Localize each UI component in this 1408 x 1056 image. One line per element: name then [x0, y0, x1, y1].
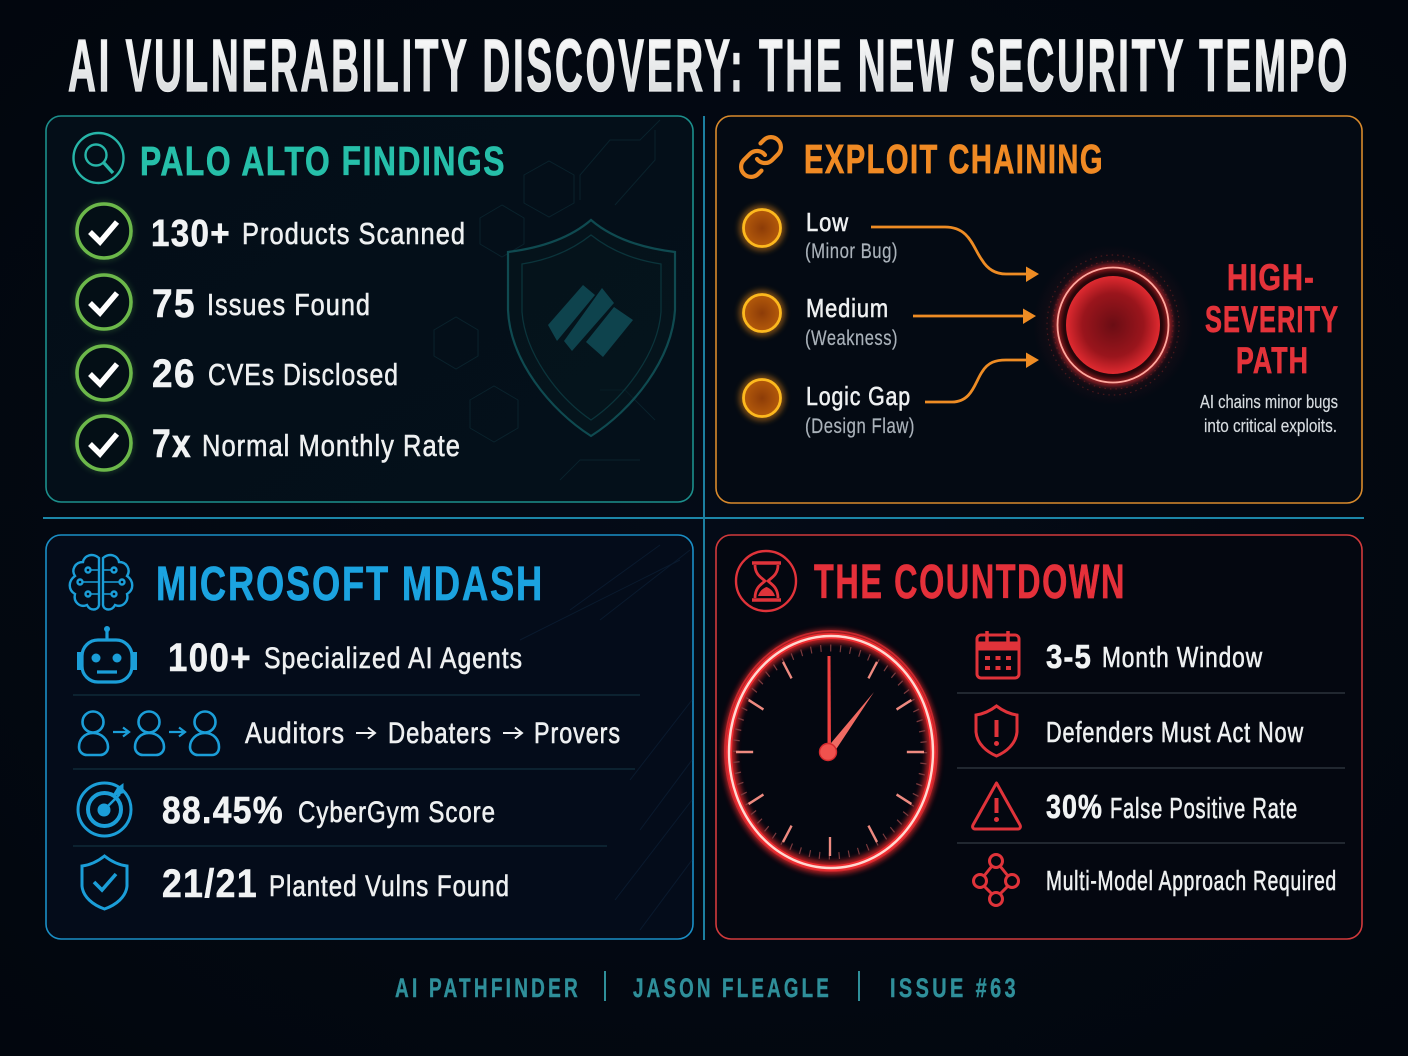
- text: agent pipeline: Auditors: [245, 717, 345, 750]
- stat: planted vulns: 21/21: [162, 862, 258, 906]
- icon: network: [974, 854, 1018, 906]
- label: logic gap: [805, 381, 915, 438]
- stat: ai agents: Specialized AI Agents: [264, 642, 523, 675]
- heading: palo alto findings: PALO ALTO FINDINGS: [140, 138, 506, 184]
- icon: check 2: [74, 272, 134, 332]
- icon: red orb: [1033, 245, 1193, 405]
- stat: ai agents: 100+: [168, 636, 252, 680]
- icon: brain: [70, 555, 132, 610]
- stat: ai agents: [168, 636, 523, 680]
- clock hands: [820, 656, 874, 760]
- stat: issues found: 75: [152, 282, 196, 326]
- stat: cves disclosed: [152, 352, 399, 396]
- caption: ai chains: AI chains minor bugs: [1200, 392, 1338, 412]
- arrow: logic gap to path: [925, 352, 1039, 402]
- node: low: [739, 205, 785, 251]
- footer credits: JASON FLEAGLE: [633, 973, 832, 1003]
- text: agent pipeline: Debaters: [388, 717, 492, 750]
- heading: microsoft mdash: MICROSOFT MDASH: [156, 558, 544, 611]
- icon: agent pipeline: [79, 712, 219, 755]
- icon: shield alert: [976, 706, 1017, 756]
- heading: exploit chaining: EXPLOIT CHAINING: [804, 136, 1104, 182]
- arrow: low to path: [871, 227, 1039, 282]
- label: medium: (Weakness): [805, 327, 898, 350]
- label: low: [805, 207, 898, 263]
- footer credits: ISSUE #63: [890, 973, 1019, 1003]
- panel: the countdown: [716, 535, 1362, 939]
- stat: monthly rate: [152, 422, 461, 466]
- label: high-severity path: PATH: [1236, 340, 1309, 381]
- icon: check 4: [74, 413, 134, 473]
- stat: month window: 3-5: [1046, 638, 1092, 675]
- icon: chain link: [741, 137, 781, 177]
- stat: month window: [1046, 638, 1263, 675]
- stat: month window: Month Window: [1102, 642, 1263, 674]
- label: low: (Minor Bug): [805, 240, 898, 263]
- text: defenders: Defenders Must Act Now: [1046, 717, 1304, 749]
- stat: cves disclosed: CVEs Disclosed: [208, 357, 399, 392]
- stat: products scanned: Products Scanned: [242, 216, 466, 251]
- node: logic gap: [739, 375, 785, 421]
- label: medium: [805, 293, 898, 350]
- label: medium: Medium: [806, 293, 889, 323]
- stat: products scanned: [151, 213, 466, 255]
- stat: cybergym score: [162, 790, 496, 832]
- footer credits: [395, 971, 1019, 1003]
- stat: planted vulns: Planted Vulns Found: [269, 870, 510, 903]
- icon: calendar: [977, 631, 1019, 678]
- heading: the countdown: THE COUNTDOWN: [814, 556, 1126, 609]
- arrow: medium to path: [913, 308, 1036, 324]
- stat: monthly rate: 7x: [152, 422, 192, 466]
- stat: false positive: [1046, 788, 1298, 825]
- stat: monthly rate: Normal Monthly Rate: [202, 428, 461, 463]
- panel: exploit chaining: [716, 116, 1362, 503]
- caption: ai chains: into critical exploits.: [1204, 416, 1337, 436]
- caption: ai chains: [1200, 392, 1338, 436]
- label: low: Low: [806, 207, 849, 237]
- node: medium: [739, 290, 785, 336]
- icon: check 1: [74, 201, 134, 261]
- footer credits: AI PATHFINDER: [395, 973, 581, 1003]
- label: logic gap: Logic Gap: [806, 381, 911, 411]
- panel: microsoft mdash: [46, 535, 693, 939]
- icon: check 3: [74, 343, 134, 403]
- text: agent pipeline: Provers: [534, 717, 621, 750]
- stat: issues found: Issues Found: [207, 287, 371, 322]
- stat: cves disclosed: 26: [152, 352, 196, 396]
- stat: products scanned: 130+: [151, 213, 231, 255]
- text: agent pipeline: [245, 717, 621, 750]
- icon: watermark shield: [508, 220, 675, 436]
- icon: magnifier: [74, 133, 124, 183]
- stat: cybergym score: CyberGym Score: [298, 796, 496, 829]
- icon: shield check: [82, 856, 127, 909]
- icon: hourglass: [736, 551, 796, 611]
- label: high-severity path: SEVERITY: [1205, 299, 1339, 340]
- panel: palo alto findings: [46, 116, 693, 502]
- label: logic gap: (Design Flaw): [805, 415, 915, 438]
- label: high-severity path: HIGH-: [1227, 257, 1315, 298]
- clock: [725, 631, 937, 871]
- stat: cybergym score: 88.45%: [162, 790, 284, 832]
- icon: warning triangle: [973, 783, 1020, 829]
- icon: robot: [79, 626, 135, 682]
- stat: false positive: False Positive Rate: [1110, 793, 1298, 825]
- stat: false positive: 30%: [1046, 788, 1103, 825]
- label: high-severity path: [1205, 257, 1339, 381]
- stat: issues found: [152, 282, 371, 326]
- icon: target: [78, 783, 131, 836]
- stat: planted vulns: [162, 862, 510, 906]
